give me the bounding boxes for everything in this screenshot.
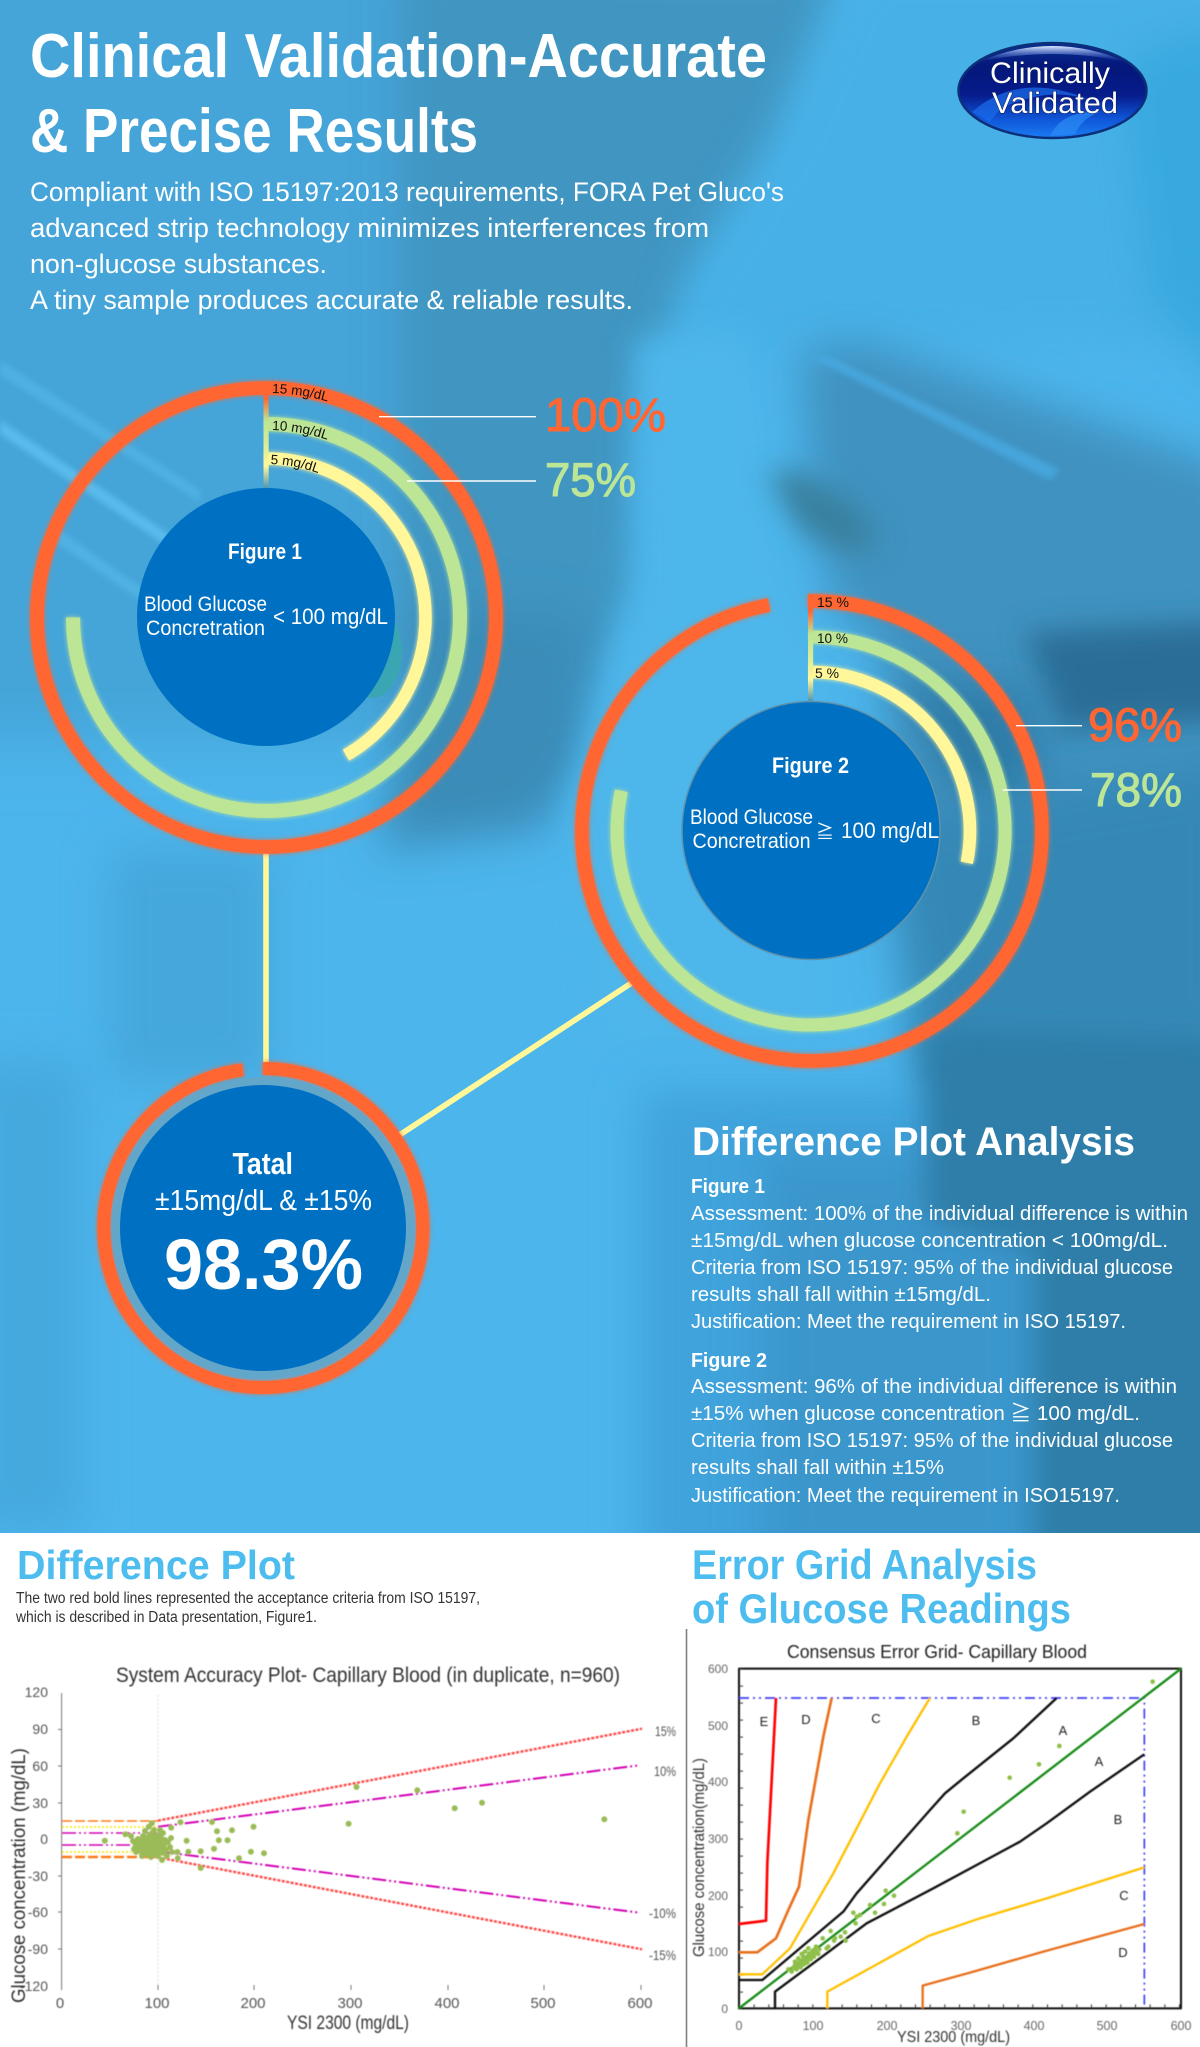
x axis labels: 300 [951,2019,971,2033]
x axis labels: 500 [530,1995,556,2012]
x axis labels: 0 [736,2019,743,2033]
total text [155,1146,372,1305]
panel: total circle [104,1068,423,1387]
blurred photo background [0,0,1200,1580]
heading: error grid analysis: of Glucose Readings [692,1585,1071,1632]
total halo [112,1077,414,1379]
x axis labels: 200 [240,1995,266,2012]
zone letters: A [1095,1754,1104,1769]
centre disc [682,702,940,960]
heading: error grid analysis [692,1541,1071,1632]
zone letters: B [1114,1812,1122,1827]
x axis labels [736,2019,1191,2033]
ring: 5 mg/dL [266,458,426,755]
chart title: System Accuracy Plot- Capillary Blood (in duplicate, n=960) [116,1664,620,1687]
badge: clinically validated: Clinically [990,57,1110,90]
x axis labels: 100 [803,2019,823,2033]
ring labels [815,595,849,681]
text block: figure 2 analysis: Justification: Meet the requirement in ISO15197. [691,1484,1120,1507]
axis titles: YSI 2300 (mg/dL) [897,2029,1010,2046]
total disc [120,1085,406,1371]
y axis labels: 0 [40,1831,48,1847]
badge: clinically validated [958,43,1146,138]
disc text: Concretration [146,617,265,640]
text block: figure 1 analysis: ±15mg/dL when glucose concentration < 100mg/dL. [691,1229,1168,1252]
badge: clinically validated: Validated [992,87,1118,120]
y axis labels: -30 [28,1868,48,1884]
zone letters: D [801,1712,811,1727]
stem [264,382,269,490]
intro paragraph: A tiny sample produces accurate & reliable results. [30,285,633,315]
ring labels: 15 % [817,595,849,610]
y axis labels: 60 [32,1758,48,1774]
inner teal crescent [342,606,402,698]
disc text: < 100 mg/dL [273,604,388,629]
connector: figure 2 to total [398,982,633,1136]
stem [808,595,813,703]
divider between charts [686,1629,688,2047]
ring: 15 mg/dL 100% [37,388,496,847]
title: Clinical Validation-Accurate [30,22,767,91]
disc text: Figure 2 [772,753,849,778]
line labels: 15% [655,1723,676,1739]
disc text: Blood Glucose [144,593,267,616]
y axis labels: 200 [708,1889,728,1903]
y axis labels: -90 [28,1941,48,1957]
ring labels: 10 % [817,631,848,646]
total text: 98.3% [164,1226,363,1305]
callout: figure 1 100%: 100% [545,388,666,441]
zone C lines [739,1698,930,1974]
x axis labels: 200 [877,2019,897,2033]
chart: system accuracy difference plot [9,1664,676,2034]
y axis labels [708,1662,728,2016]
ring labels: 10 mg/dL [273,420,328,440]
ring: 10% 78% [617,637,1005,1025]
blue boundary [739,1698,1144,2008]
ring labels: 5 % [815,666,839,681]
orange limits [62,1821,158,1857]
y axis labels: 120 [25,1684,48,1700]
x axis labels: 300 [337,1995,363,2012]
zone D lines [739,1698,832,1952]
callout: figure 2 96%: 96% [1088,698,1182,751]
text block: figure 2 analysis: Criteria from ISO 15197: 95% of the individual glucose [691,1429,1173,1452]
chart title: Consensus Error Grid- Capillary Blood [787,1642,1087,1662]
scatter points [105,1787,604,1868]
line labels: -10% [649,1905,676,1921]
zone letters: A [1059,1723,1068,1738]
text block: difference plot description: which is described in Data presentation, Figure1. [15,1609,317,1626]
intro paragraph: non-glucose substances. [30,249,327,279]
disc text [690,753,939,853]
text block: figure 2 analysis [691,1349,1177,1507]
text block: figure 2 analysis: Figure 2 [691,1349,767,1372]
plot frame and lines [739,1669,1181,2008]
intro paragraph [30,177,784,315]
title [30,22,767,166]
total text: Tatal [232,1146,293,1181]
disc text: ≧ [816,822,834,842]
zone B lines [739,1698,1057,1980]
text block: figure 1 analysis: Assessment: 100% of the individual difference is within [691,1202,1188,1225]
disc text: Figure 1 [228,539,302,564]
axes [58,1693,641,1990]
y axis labels [20,1684,48,1994]
heading: difference plot: Difference Plot [17,1542,295,1588]
x axis labels: 400 [434,1995,460,2012]
intro paragraph: advanced strip technology minimizes interferences from [30,213,709,243]
line labels: -15% [649,1947,676,1963]
chart: consensus error grid: Glucose concentration(mg/dL) [691,1758,708,1957]
ring labels [271,384,328,473]
text block: difference plot description: The two red bold lines represented the acceptance criteria from ISO 15197, [16,1590,480,1607]
ring labels: 15 mg/dL [273,384,328,402]
ring: 5% [811,672,970,863]
disc text: 100 mg/dL [841,818,939,843]
text block: figure 1 analysis: Criteria from ISO 15197: 95% of the individual glucose [691,1256,1173,1279]
centre disc [137,488,395,746]
y axis labels: 100 [708,1945,728,1959]
y axis labels: 30 [32,1795,48,1811]
title: & Precise Results [30,97,478,166]
heading: difference plot analysis: Difference Plot Analysis [692,1120,1135,1164]
panel: figure 1 rings [26,378,506,858]
y axis labels: 600 [708,1662,728,1676]
x axis labels [56,1995,653,2012]
callout: figure 1 75%: 75% [545,453,636,506]
y axis labels: -120 [20,1978,48,1994]
identity line [739,1669,1181,2008]
text block: figure 2 analysis: results shall fall within ±15% [691,1456,944,1479]
text block: figure 1 analysis [691,1175,1188,1333]
chart: system accuracy difference plot: Glucose concentration (mg/dL) [9,1748,30,2003]
x axis labels: 0 [56,1995,64,2012]
y axis labels: 90 [32,1721,48,1737]
y axis labels: 500 [708,1719,728,1733]
disc text [144,539,388,640]
line labels: 10% [654,1763,676,1779]
axis titles: YSI 2300 (mg/dL) [287,2013,409,2034]
y axis labels: -60 [28,1904,48,1920]
x axis labels: 600 [1171,2019,1191,2033]
x axis labels: 500 [1097,2019,1117,2033]
text block: figure 2 analysis: ±15% when glucose concentration ≧ 100 mg/dL. [691,1402,1140,1425]
x axis labels: 100 [144,1995,170,2012]
magenta limits [62,1766,638,1912]
callout: figure 2 78%: 78% [1090,763,1182,816]
total ring [104,1068,423,1387]
zone letters: E [760,1714,769,1729]
heading: error grid analysis: Error Grid Analysis [692,1541,1037,1588]
ring: 15% 96% [582,601,1042,1061]
zone letters [760,1711,1129,1960]
chart: consensus error grid [691,1642,1191,2046]
y axis labels: 0 [721,2002,728,2016]
connector: figure 1 to total [263,850,269,1064]
red limits [158,1729,642,1949]
zone letters: D [1118,1945,1128,1960]
total text: ±15mg/dL & ±15% [155,1185,372,1217]
yellow limits [62,1827,158,1852]
ring labels: 5 mg/dL [271,454,318,473]
zone E line [739,1698,776,1924]
ring: 10 mg/dL 75% [73,424,460,811]
x axis labels: 400 [1024,2019,1044,2033]
zone letters: C [1119,1888,1129,1903]
line labels [649,1723,676,1963]
text block: figure 1 analysis: Justification: Meet the requirement in ISO 15197. [691,1310,1126,1333]
y axis labels: 300 [708,1832,728,1846]
disc text: Concretration [692,830,810,853]
panel: figure 2 rings [582,595,1042,1061]
text block: figure 2 analysis: Assessment: 96% of the individual difference is within [691,1375,1177,1398]
x axis labels: 600 [627,1995,653,2012]
text block: figure 1 analysis: Figure 1 [691,1175,765,1198]
scatter points [788,1682,1153,1972]
zone letters: B [972,1713,980,1728]
text block: figure 1 analysis: results shall fall within ±15mg/dL. [691,1283,991,1306]
disc text: Blood Glucose [690,806,813,829]
intro paragraph: Compliant with ISO 15197:2013 requirements, FORA Pet Gluco's [30,177,784,207]
text block: difference plot description [15,1590,480,1626]
zone letters: C [871,1711,881,1726]
y axis labels: 400 [708,1775,728,1789]
